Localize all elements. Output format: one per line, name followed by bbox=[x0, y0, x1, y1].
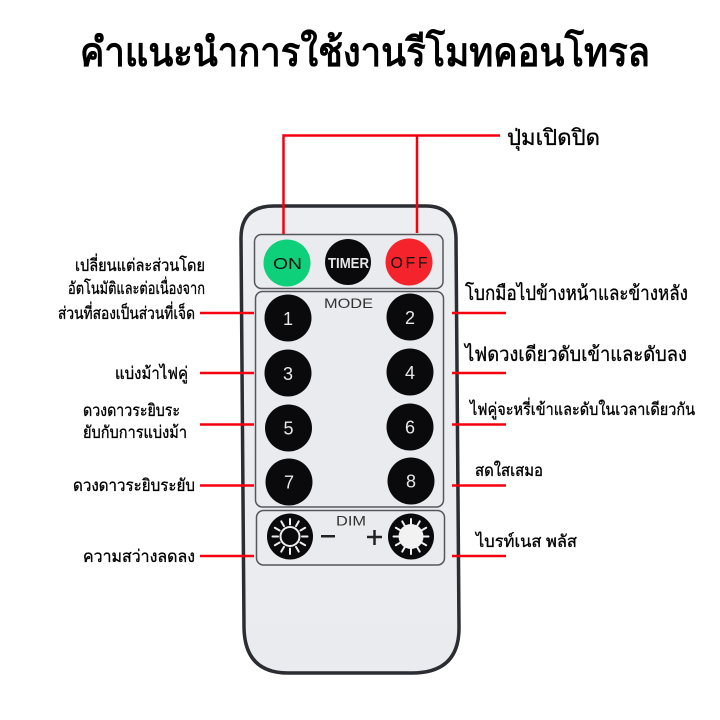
button 8: 8 bbox=[406, 472, 416, 492]
button 8 bbox=[388, 458, 434, 504]
mode label: MODE bbox=[324, 295, 373, 311]
button 6: 6 bbox=[405, 418, 415, 438]
button: TIMER: TIMER bbox=[328, 255, 369, 272]
plus sign bbox=[367, 530, 382, 545]
connector: power buttons bracket bbox=[284, 136, 500, 234]
button 2 bbox=[386, 294, 434, 340]
icon: brightness up sun bbox=[388, 514, 434, 560]
label: mode 2: โบกมือไปข้างหน้าและข้างหลัง bbox=[465, 282, 688, 305]
button 3 bbox=[264, 350, 312, 396]
panel: dim controls bbox=[256, 510, 444, 565]
label: mode 3: แบ่งม้าไฟคู่ bbox=[115, 363, 188, 384]
remote control bbox=[58, 125, 695, 673]
left connectors bbox=[200, 313, 254, 556]
label: mode 1: ส่วนที่สองเป็นส่วนที่เจ็ด bbox=[58, 301, 195, 323]
button 7 bbox=[266, 458, 312, 506]
button 4 bbox=[386, 348, 434, 396]
label: mode 5: ดวงดาวระยิบระ bbox=[83, 401, 180, 420]
button 1 bbox=[264, 294, 312, 342]
title: คำแนะนำการใช้งานรีโมทคอนโทรล bbox=[80, 29, 650, 75]
button 4: 4 bbox=[405, 363, 415, 383]
button 6 bbox=[386, 404, 434, 450]
button: OFF: OFF bbox=[390, 255, 428, 272]
label: brightness up: ไบรท์เนส พลัส bbox=[474, 531, 578, 551]
button: TIMER bbox=[325, 239, 371, 285]
button 7: 7 bbox=[284, 472, 294, 492]
panel: power buttons bbox=[254, 234, 443, 288]
remote body bbox=[241, 206, 459, 673]
button 1: 1 bbox=[283, 309, 293, 329]
dim label: DIM bbox=[336, 512, 366, 528]
button 2: 2 bbox=[405, 308, 415, 328]
panel: mode buttons bbox=[256, 292, 444, 507]
label: mode 5 bbox=[83, 401, 187, 442]
minus sign bbox=[321, 535, 335, 538]
label: mode 4: ไฟดวงเดียวดับเข้าและดับลง bbox=[463, 343, 687, 366]
button: ON bbox=[264, 240, 310, 286]
button: OFF bbox=[386, 238, 432, 286]
button 3: 3 bbox=[283, 364, 293, 384]
button 5: 5 bbox=[283, 418, 294, 438]
label: mode 1: อัตโนมัติและต่อเนื่องจาก bbox=[68, 276, 205, 298]
label: mode 5: ยับกับการแบ่งม้า bbox=[83, 423, 187, 442]
label: mode 8: สดใสเสมอ bbox=[475, 460, 543, 480]
label: dim down: ความสว่างลดลง bbox=[83, 547, 195, 566]
label: mode 7: ดวงดาวระยิบระยับ bbox=[73, 476, 195, 495]
icon: dim down sun bbox=[267, 514, 313, 560]
label: mode 1 bbox=[58, 253, 205, 323]
button 5 bbox=[265, 404, 312, 452]
label: mode 1: เปลี่ยนแต่ละส่วนโดย bbox=[75, 253, 205, 275]
right connectors bbox=[452, 313, 506, 556]
label: power on off: ปุ่มเปิดปิด bbox=[507, 125, 600, 151]
button: ON: ON bbox=[273, 256, 302, 273]
